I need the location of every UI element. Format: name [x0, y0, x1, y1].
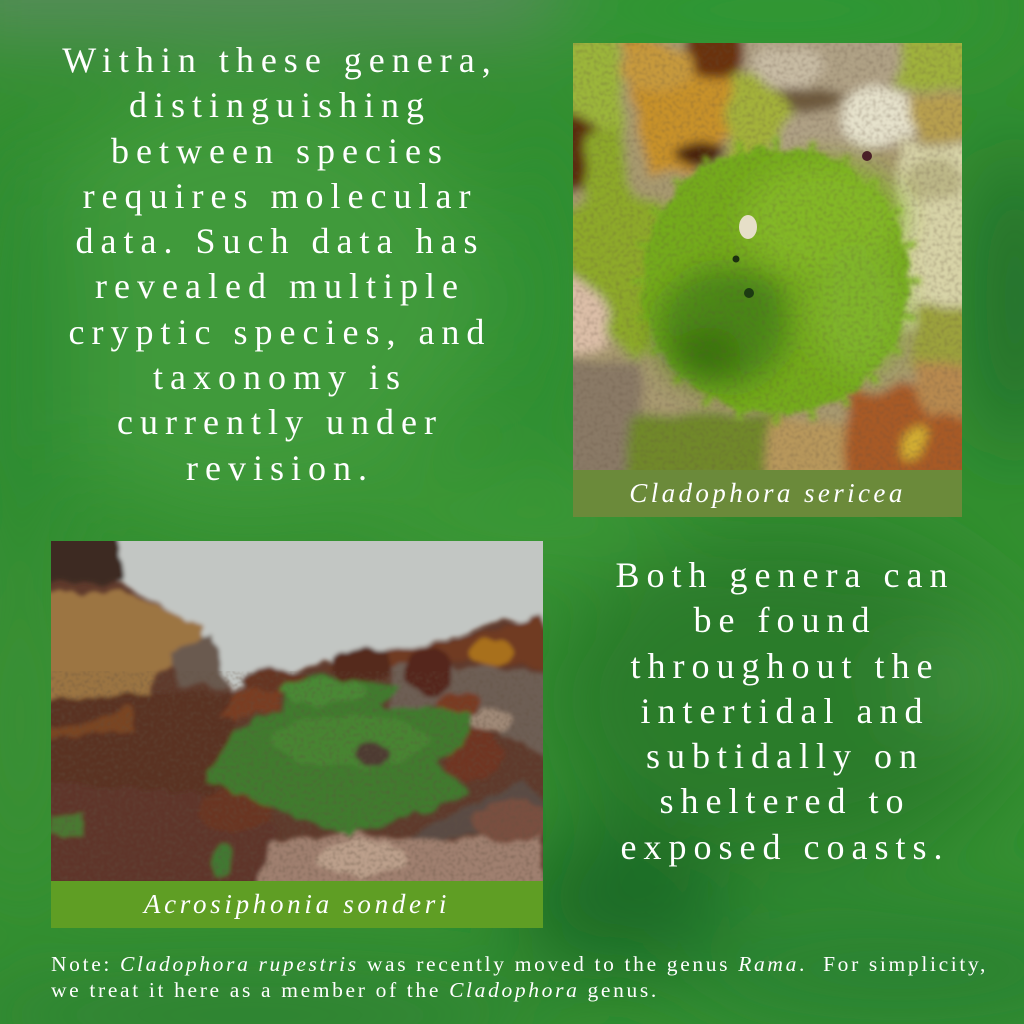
- note: footnote text: [51, 952, 988, 1002]
- panel: Both genera text block: throughout the: [630, 646, 939, 686]
- panel: Within these genera text block: [62, 40, 498, 488]
- panel: Within these genera text block: revision.: [186, 448, 374, 488]
- photo: Cladophora sericea: [573, 43, 962, 470]
- panel: Within these genera text block: data. Such data has: [76, 221, 484, 261]
- panel: Both genera text block: exposed coasts.: [621, 827, 949, 867]
- panel: Within these genera text block: cryptic species, and: [69, 312, 491, 352]
- panel: Both genera text block: sheltered to: [660, 781, 910, 821]
- panel: Within these genera text block: Within these genera,: [62, 40, 498, 80]
- panel: Within these genera text block: between species: [111, 131, 449, 171]
- panel: Both genera text block: [616, 555, 954, 867]
- caption: Acrosiphonia sonderi: [51, 881, 543, 928]
- caption: Cladophora sericea: [573, 470, 962, 517]
- panel: Within these genera text block: taxonomy is: [153, 357, 407, 397]
- caption: Cladophora sericea: Cladophora sericea: [629, 478, 906, 508]
- caption: Acrosiphonia sonderi: Acrosiphonia sonderi: [144, 889, 450, 919]
- panel: Both genera text block: subtidally on: [646, 736, 924, 776]
- note: footnote text: we treat it here as a member of the Cladophora genus.: [51, 978, 659, 1002]
- panel: Both genera text block: Both genera can: [616, 555, 954, 595]
- panel: Both genera text block: intertidal and: [641, 691, 929, 731]
- panel: Within these genera text block: requires molecular: [83, 176, 477, 216]
- panel: Within these genera text block: currently under: [117, 402, 443, 442]
- panel: Within these genera text block: revealed multiple: [95, 266, 465, 306]
- photo: Acrosiphonia sonderi: [51, 541, 543, 881]
- panel: Within these genera text block: distinguishing: [129, 85, 431, 125]
- note: footnote text: Note: Cladophora rupestris was recently moved to the genus Rama. For simplicity,: [51, 952, 988, 976]
- panel: Both genera text block: be found: [694, 600, 876, 640]
